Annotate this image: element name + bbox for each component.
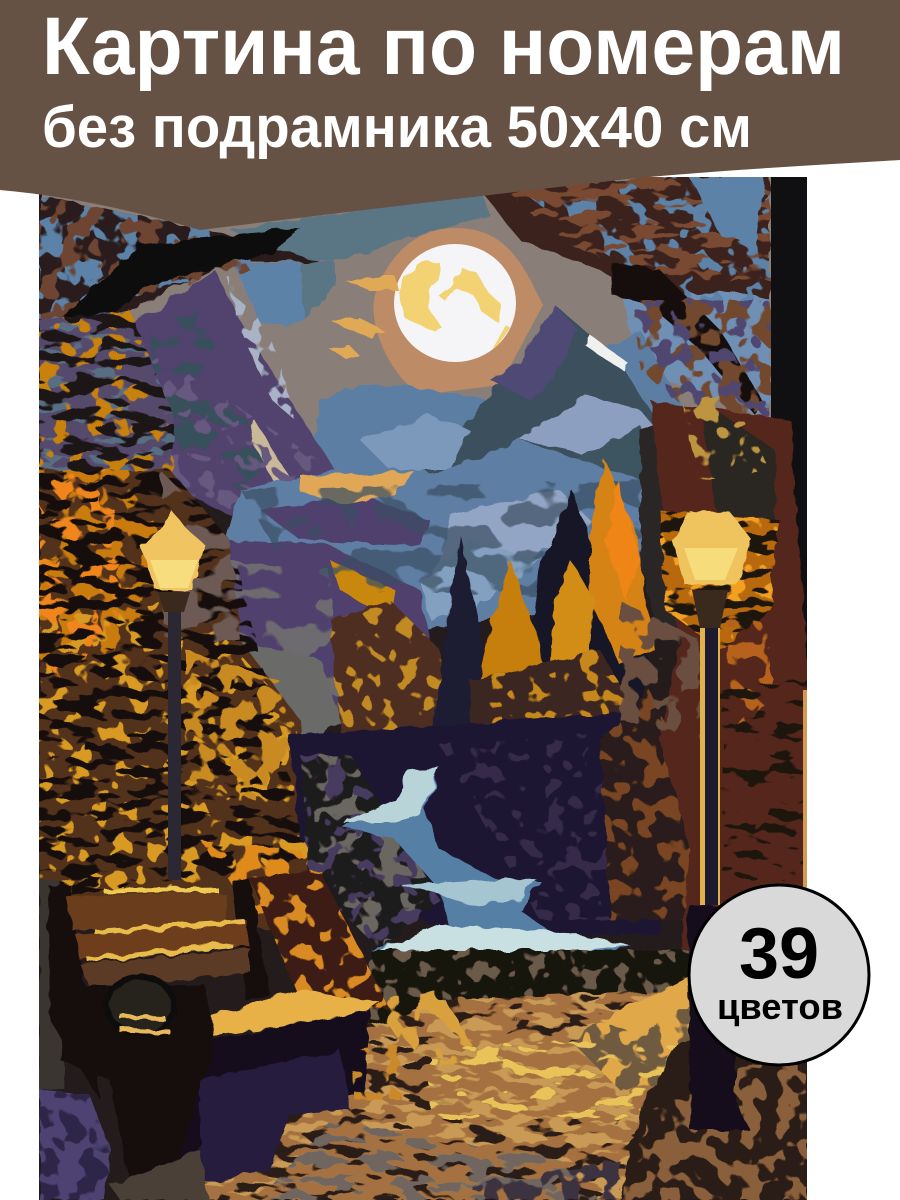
- left mountain: [135, 270, 334, 516]
- waterfall: [340, 768, 630, 955]
- sky: [42, 177, 771, 438]
- badge: 39 colours: 39: [739, 914, 819, 994]
- badge: 39 colours: [689, 885, 869, 1065]
- left lamp: [142, 512, 205, 880]
- bench: [39, 870, 390, 1190]
- left autumn tree: [39, 468, 308, 930]
- middle ridges: [210, 440, 640, 750]
- center pines and autumn trees: [330, 426, 676, 734]
- banner background: [0, 0, 900, 230]
- moon: [328, 228, 543, 395]
- dark trunk: [771, 177, 807, 687]
- badge: 39 colours: цветов: [717, 986, 843, 1027]
- right autumn tree: [620, 395, 807, 1000]
- title: Картина по номерам: [42, 1, 845, 92]
- right lamp: [672, 510, 752, 1130]
- dark rock: [290, 690, 700, 950]
- shadow under bench: [39, 1040, 420, 1200]
- left trees, upper: [39, 195, 320, 500]
- far mountains: [314, 306, 683, 480]
- lower ground: [200, 950, 807, 1200]
- top right tree canopy: [480, 172, 770, 420]
- painting: [39, 172, 807, 1200]
- subtitle: без подрамника 50х40 см: [42, 95, 752, 160]
